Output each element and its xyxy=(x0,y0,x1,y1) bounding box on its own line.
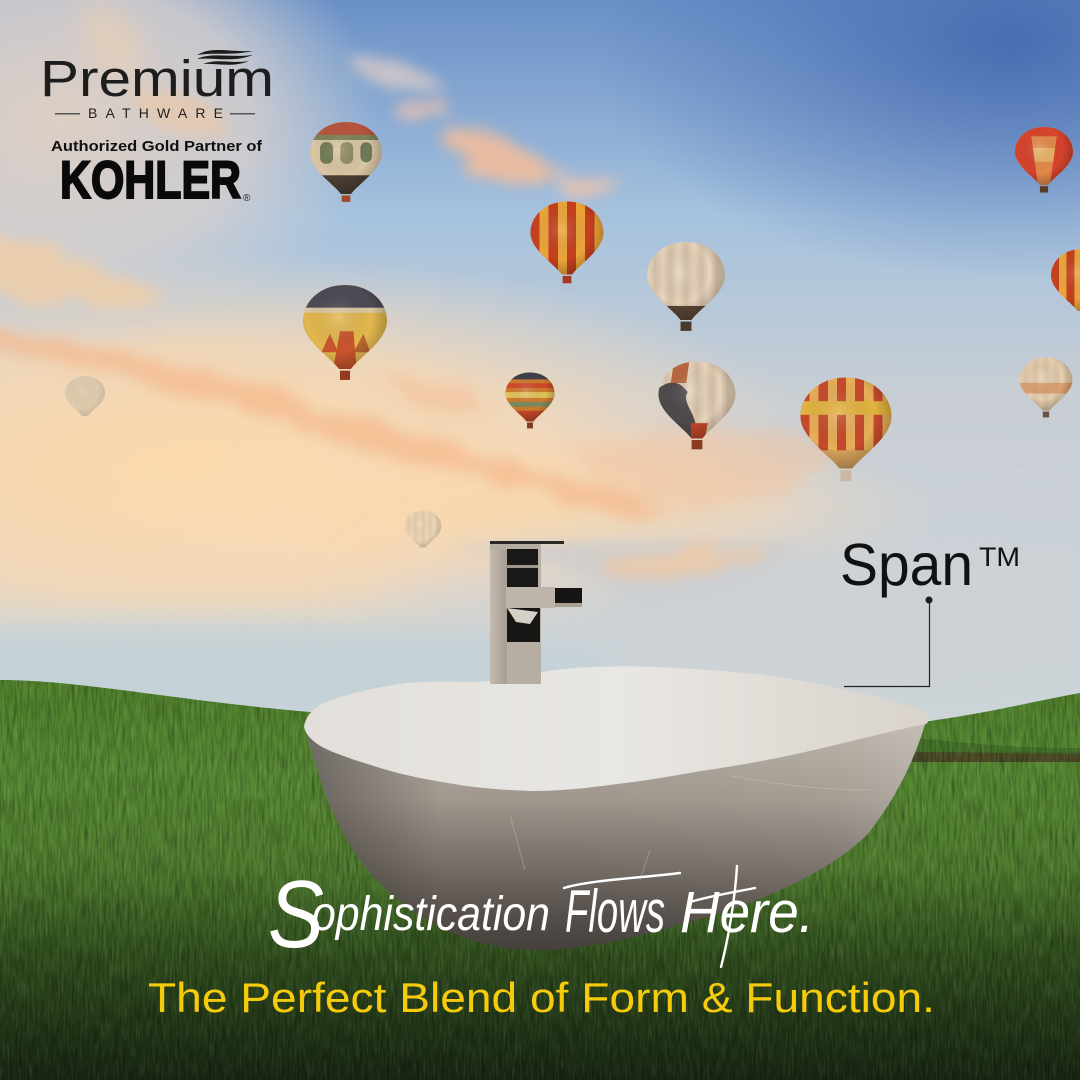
balloon: faint left xyxy=(65,376,105,417)
logo: Kohler: KOHLER xyxy=(60,151,241,210)
tagline: yellow: The Perfect Blend of Form & Function. xyxy=(148,974,935,1021)
balloon: cream large xyxy=(647,242,725,331)
balloon: top right orange xyxy=(1015,127,1073,193)
logo: Kohler: ® xyxy=(243,193,251,204)
logo: Premium Bathware xyxy=(40,50,274,121)
sky background xyxy=(0,0,1080,720)
basin body xyxy=(305,718,927,950)
balloon: small banded xyxy=(506,372,554,428)
flourishes xyxy=(564,866,755,967)
faucet xyxy=(490,541,582,684)
balloon: cream with windows xyxy=(310,122,382,202)
balloon: red and yellow large xyxy=(800,378,892,481)
tagline: script xyxy=(268,861,814,968)
logo: Premium Bathware: Premium xyxy=(40,50,274,107)
grass field xyxy=(0,680,1080,1080)
leader line xyxy=(844,596,932,686)
balloon: orange stripes xyxy=(530,202,604,283)
wave mark xyxy=(197,50,253,65)
tagline: script: Here. xyxy=(680,880,814,945)
balloon: right small cream xyxy=(1020,358,1072,417)
clouds xyxy=(0,0,850,605)
marble veins xyxy=(510,776,870,880)
balloon: right edge partial xyxy=(1051,249,1080,312)
balloon: cream and dark xyxy=(658,362,736,449)
balloon: faint centre xyxy=(404,510,442,548)
tagline: script: Flows xyxy=(565,878,665,945)
product label: Span xyxy=(840,532,1020,686)
basin rim xyxy=(304,666,929,791)
balloon: yellow with dark top xyxy=(303,285,387,380)
product label: Span: Span xyxy=(840,532,973,598)
product label: Span: TM xyxy=(979,542,1020,572)
basin xyxy=(304,666,929,950)
logo: Premium Bathware: BATHWARE xyxy=(88,105,223,121)
hot air balloons xyxy=(65,122,1080,548)
partner line: Authorized Gold Partner of xyxy=(51,138,263,155)
tagline: script: S xyxy=(268,861,324,968)
tagline: script: ophistication xyxy=(312,888,550,941)
